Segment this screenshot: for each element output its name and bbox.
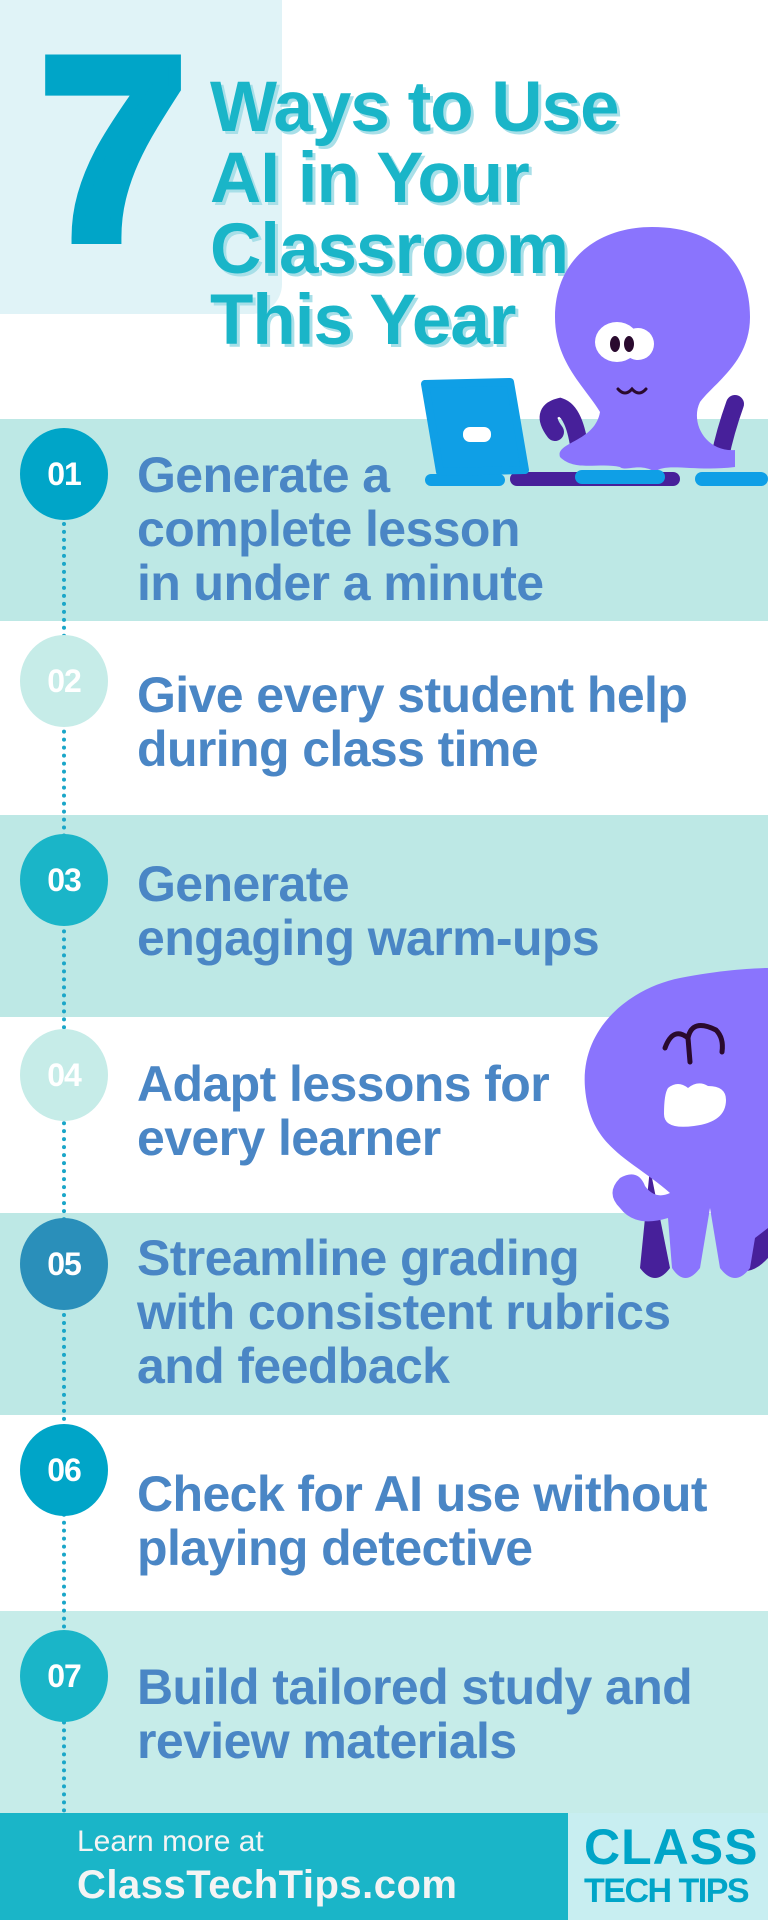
step text 01: complete lesson [137, 501, 520, 557]
step text 06: Check for AI use without [137, 1466, 707, 1522]
number badge 04 [20, 1029, 108, 1121]
header panel background [0, 0, 282, 314]
step 01 [20, 428, 544, 611]
number badge 07: 07 [47, 1658, 81, 1694]
step 05 [20, 1218, 671, 1394]
footer [0, 1813, 768, 1920]
logo: CLASS [584, 1819, 758, 1875]
step text 01 [137, 447, 544, 611]
number badge 06 [20, 1424, 108, 1516]
number badge 05 [20, 1218, 108, 1310]
step text 02 [137, 667, 687, 777]
step text 03 [137, 856, 599, 966]
step text 01: in under a minute [137, 555, 544, 611]
step text 07 [137, 1659, 692, 1769]
number badge 02: 02 [47, 662, 81, 698]
title: Ways to Use [210, 68, 619, 147]
step text 05: and feedback [137, 1338, 449, 1394]
step text 05: Streamline grading [137, 1230, 579, 1286]
step 04 [20, 1029, 549, 1166]
octopus 1 with laptop [421, 227, 768, 486]
footer call to action [77, 1825, 458, 1907]
number badge 04: 04 [47, 1056, 81, 1092]
step text 05: with consistent rubrics [137, 1284, 671, 1340]
band backgrounds [0, 419, 768, 621]
big number 7: 7 [40, 4, 186, 293]
step text 04: every learner [137, 1110, 441, 1166]
step 03 [20, 834, 599, 966]
dotted timeline [62, 474, 66, 1814]
step text 06: playing detective [137, 1520, 532, 1576]
logo: TECH TIPS [584, 1872, 748, 1910]
step text 05 [136, 1230, 671, 1394]
step text 01: Generate a [137, 447, 389, 503]
number badge 01 [20, 428, 108, 520]
title [210, 68, 620, 360]
title: AI in Your [210, 139, 529, 218]
number badge 05: 05 [47, 1246, 81, 1282]
footer call to action: ClassTechTips.com [77, 1863, 458, 1907]
number badge 06: 06 [47, 1452, 81, 1488]
step text 07: review materials [137, 1713, 517, 1769]
number badge 02 [20, 635, 108, 727]
number badge 03 [20, 834, 108, 926]
step text 07: Build tailored study and [137, 1659, 692, 1715]
step 02 [20, 635, 687, 777]
step text 04 [137, 1056, 549, 1166]
step text 02: during class time [137, 721, 538, 777]
step text 03: engaging warm-ups [137, 910, 599, 966]
step 07 [20, 1630, 692, 1769]
number badge 07 [20, 1630, 108, 1722]
step 06 [20, 1424, 707, 1576]
number badge 03: 03 [47, 862, 81, 898]
octopus 2 smiling [584, 968, 768, 1278]
step text 03: Generate [137, 856, 349, 912]
step text 06 [137, 1466, 707, 1576]
title: This Year [210, 281, 515, 360]
title: Classroom [210, 210, 568, 289]
step text 04: Adapt lessons for [137, 1056, 549, 1112]
footer call to action: Learn more at [77, 1825, 264, 1858]
step text 02: Give every student help [137, 667, 687, 723]
number badge 01: 01 [47, 456, 81, 492]
logo [568, 1813, 768, 1920]
